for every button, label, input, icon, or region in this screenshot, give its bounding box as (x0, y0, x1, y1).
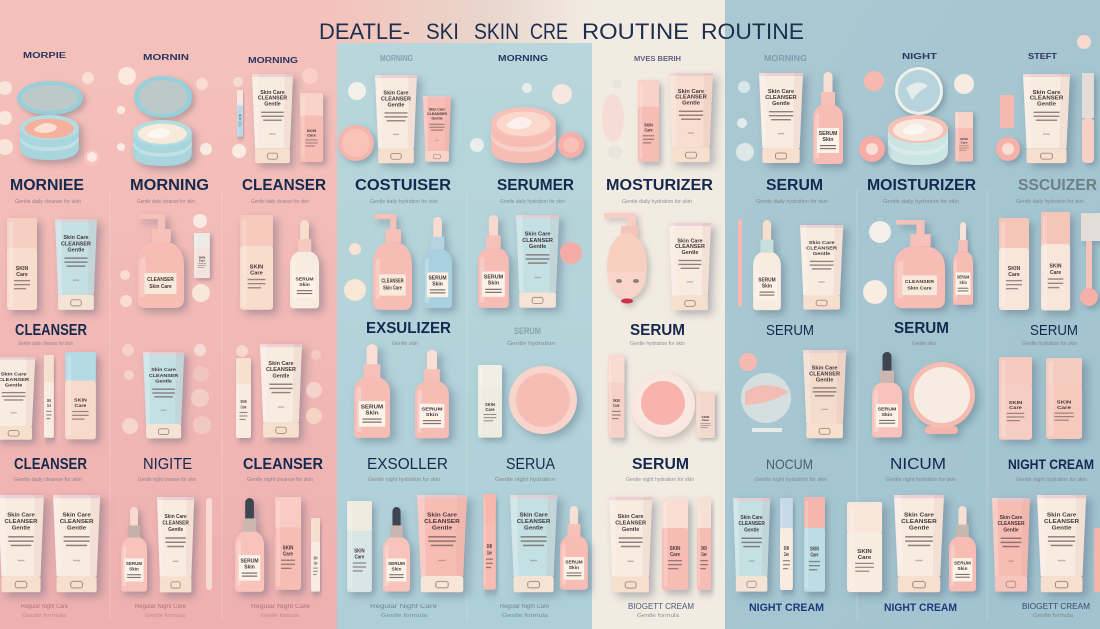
step heading: SERUM (766, 322, 814, 339)
description: Gentle daily cleanse for skin (14, 477, 82, 483)
bottle (847, 502, 882, 592)
step heading: NIGITE (143, 456, 192, 473)
pump head (604, 213, 647, 304)
product name: BIOGETT CREAM (628, 602, 694, 611)
title: SKI (426, 19, 459, 44)
pink tube (423, 96, 451, 162)
stick bottle (478, 365, 502, 438)
cream dabs (236, 345, 322, 424)
jar (888, 115, 948, 165)
dropper bottle (478, 215, 509, 308)
step heading: NICUM (890, 456, 946, 473)
pump bottle (894, 220, 945, 308)
tube (800, 225, 843, 310)
description: Gentle daily cleanse for skin (251, 199, 309, 205)
description: Gentle skin (392, 341, 418, 347)
bottle (1041, 212, 1070, 310)
pink stick (483, 494, 496, 590)
dropper bottle (290, 220, 319, 308)
panel: row 2 column 3 (240, 215, 319, 310)
step heading: SSCUIZER (1018, 177, 1097, 194)
description: Gentle night hydration for skin (1016, 477, 1087, 483)
tube (894, 495, 944, 592)
tube (733, 498, 770, 592)
bottle (240, 215, 273, 310)
pump bottle (373, 214, 412, 310)
stick (780, 498, 793, 590)
step label: MORNING (248, 56, 298, 65)
dropper bottle (415, 350, 449, 438)
panel: row 4 column 8 (847, 495, 976, 614)
cream dabs (470, 83, 572, 152)
description: Gentle hydration for skin (1022, 341, 1077, 347)
round mirror (909, 362, 975, 434)
round cream jar (631, 373, 695, 437)
tube (510, 495, 557, 592)
tube (53, 495, 100, 592)
description: Gentle daily hydration for skin (622, 199, 692, 205)
panel: row 1 column 3 (232, 56, 326, 205)
panel: row 2 column 5 (478, 215, 582, 347)
product note: Gentle formula (22, 613, 66, 619)
glass globe (741, 373, 791, 432)
panel: row 3 column 8 (872, 352, 975, 483)
description: Gentle daily hydration for skin (370, 199, 438, 205)
tube (669, 73, 713, 162)
pink bottle (662, 498, 688, 590)
panel: row 4 column 6 (609, 497, 711, 619)
step heading: SERUM (894, 320, 949, 337)
panel: row 3 column 9 (999, 357, 1094, 483)
tube (1037, 495, 1086, 592)
step heading: MORNIEE (10, 177, 84, 194)
edge stick (1094, 528, 1100, 592)
product name: NIGHT CREAM (749, 602, 824, 614)
compact mirror lid (134, 76, 192, 118)
step label: MORNING (380, 54, 413, 63)
cream dab (348, 82, 366, 100)
dropper bottle (813, 72, 843, 164)
title: ROUTINE (701, 19, 804, 44)
lip bottle (804, 497, 825, 592)
panel: row 4 column 4 (347, 495, 467, 619)
step heading: MOISTURIZER (867, 177, 976, 194)
step label: MORNIN (143, 53, 189, 62)
slim bottle (697, 498, 711, 590)
tube (143, 352, 184, 438)
panel: row 3 column 4 (354, 344, 449, 483)
compact mirror lid (17, 81, 83, 115)
panel: row 4 column 1 (0, 495, 100, 619)
cream puff (954, 74, 974, 94)
title: CRE (530, 19, 568, 44)
compact jar (20, 115, 79, 160)
dropper bottle (121, 507, 147, 592)
panel: row 2 column 1 (7, 218, 97, 347)
tube (609, 497, 652, 592)
compact lid (895, 67, 943, 115)
tube (375, 75, 417, 163)
product note: Gentle formula (637, 613, 679, 619)
tube (252, 74, 293, 163)
tube (417, 495, 467, 592)
panel: row 1 column 2 (117, 53, 212, 205)
small bottle (194, 233, 210, 278)
round cream jar (509, 366, 577, 434)
step heading: CLEANSER (14, 456, 87, 473)
description: Gentle daily hydration for skin (1016, 199, 1084, 205)
cream dab (1077, 35, 1091, 49)
panel: row 3 column 1 (0, 352, 96, 483)
tube (759, 73, 803, 163)
description: Gentle daily cleanse for skin (15, 199, 81, 205)
title: DEATLE- (319, 19, 410, 44)
description: Gentle hydration for skin (630, 341, 685, 347)
product note: Gentle formula (145, 613, 185, 619)
panel: row 1 column 5 (470, 54, 584, 205)
pink box (955, 112, 973, 162)
cream dabs (122, 344, 211, 434)
pink disc (558, 132, 584, 158)
description: Gentle skin (912, 341, 936, 347)
spray bottle (999, 357, 1032, 440)
panel: row 1 column 1 (0, 51, 100, 205)
slim bottle (608, 355, 624, 438)
dropper bottle (753, 220, 781, 310)
description: Gentle night hydration (495, 477, 555, 483)
product note: Gentle formula (261, 613, 299, 619)
pink compact (338, 125, 374, 161)
pink bottle (275, 497, 301, 590)
step heading: SERUM (1030, 322, 1078, 339)
pump bottle (137, 214, 184, 308)
product note: Gentle formula (502, 613, 548, 619)
pink disc (560, 242, 582, 264)
swirl decoration (602, 79, 624, 159)
step heading: SERUM (630, 322, 685, 339)
description: Gentle night cleanse for skin (247, 477, 313, 483)
panel: row 1 column 7 (736, 54, 843, 205)
step label: STEFT (1028, 52, 1057, 61)
product note: Gentle formula (1033, 613, 1073, 619)
tube (55, 219, 97, 310)
description: Gentle daily hydration for skin (500, 199, 565, 205)
panel: row 1 column 6 (602, 56, 713, 205)
tube (260, 344, 302, 438)
description: Gentle hydration (507, 341, 555, 347)
panel: row 4 column 9 (992, 495, 1100, 619)
cream dabs (736, 81, 754, 161)
panel: row 4 column 7 (733, 497, 825, 614)
tube (516, 215, 559, 308)
description: Gentle daily cleanse for skin (18, 341, 73, 347)
panel: row 2 column 7 (738, 219, 843, 339)
dropper bottle (949, 506, 976, 592)
panel: row 4 column 5 (483, 494, 588, 619)
dropper bottle (560, 506, 588, 590)
product name: Regular Night Care (21, 604, 69, 610)
bottle (1046, 358, 1082, 439)
product name: BIOGETT CREAM (1022, 602, 1090, 611)
product name: NIGHT CREAM (884, 602, 957, 614)
panel: row 1 column 4 (338, 54, 451, 205)
small bottle (696, 392, 715, 438)
step label: NIGHT (902, 52, 937, 61)
description: Gentle night hydration for skin (368, 477, 440, 483)
step heading: NOCUM (766, 456, 813, 472)
title: ROUTINE (582, 19, 689, 44)
dropper bottle (383, 507, 410, 592)
product name: Regular Night Care (251, 604, 311, 610)
pink tube (992, 498, 1030, 592)
compact jar (133, 120, 192, 166)
description: Gentle daily hydration for skin (756, 199, 828, 205)
step label: MVES BERIH (634, 56, 681, 63)
step label: MORPIE (23, 51, 67, 60)
dropper bottle (235, 498, 264, 592)
title: SKIN (474, 19, 519, 44)
step heading: SERUMER (497, 177, 574, 194)
step heading: CLEANSER (242, 177, 326, 194)
product name: Regular Night Care (370, 604, 438, 610)
panel: row 1 column 8 (859, 52, 976, 205)
panel: row 4 column 3 (235, 497, 320, 619)
stick bottle (236, 358, 251, 438)
panel: row 3 column 6 (608, 355, 715, 483)
jar (491, 107, 556, 163)
panel: row 3 column 2 (122, 344, 211, 483)
pink bottle (300, 93, 323, 162)
panel: row 3 column 3 (236, 344, 323, 483)
description: Gentle daily hydration for skin (883, 199, 959, 205)
step heading: SERUM (766, 177, 823, 194)
step label: MORNING (764, 54, 807, 63)
bottle (7, 218, 37, 310)
step heading: MORNING (130, 177, 209, 194)
step heading: CLEANSER (243, 456, 323, 473)
stick (44, 355, 54, 438)
tube (0, 495, 44, 592)
cotton puff (869, 221, 891, 243)
pink disc top (864, 71, 884, 91)
description: Gentle daily cleanse for skin (137, 199, 195, 205)
panel: row 3 column 7 (739, 350, 846, 483)
tube (803, 350, 846, 438)
panel: row 2 column 9 (999, 212, 1100, 347)
small pink box (1000, 95, 1014, 128)
panel: row 2 column 6 (604, 213, 711, 347)
panel: row 2 column 4 (344, 214, 452, 347)
step heading: CLEANSER (15, 322, 87, 339)
dropper bottle (872, 352, 902, 438)
tube (0, 357, 35, 440)
step heading: EXSULIZER (366, 320, 451, 337)
step heading: EXSOLLER (367, 456, 448, 473)
tube (669, 223, 711, 310)
product note: Gentle formula (381, 613, 427, 619)
panel: row 1 column 9 (996, 35, 1097, 205)
thin applicator (237, 90, 243, 137)
bottle (65, 352, 96, 439)
pink disc (996, 137, 1020, 161)
cream dabs (117, 67, 212, 155)
dropper bottle (354, 344, 390, 438)
tube (157, 497, 194, 592)
tube (1023, 74, 1070, 163)
cream dabs (0, 72, 100, 166)
cream dabs (232, 68, 318, 158)
brush (1082, 73, 1094, 163)
step label: MORNING (498, 54, 548, 63)
bottle (999, 218, 1029, 310)
stick (311, 518, 320, 592)
description: Gentle night hydration for skin (626, 477, 694, 483)
panel: row 2 column 2 (120, 214, 210, 308)
cream dabs (344, 243, 366, 301)
description: Gentle night cleanse for skin (138, 477, 196, 483)
step heading: SERUM (514, 326, 541, 336)
panel: row 3 column 5 (478, 365, 577, 483)
pink disc (739, 353, 757, 371)
product name: Regular Night Care (500, 604, 550, 610)
step heading: SERUM (632, 456, 689, 473)
step heading: MOSTURIZER (606, 177, 713, 194)
step heading: COSTUISER (355, 177, 451, 194)
thin stick (738, 219, 742, 307)
step heading: SERUA (506, 456, 556, 473)
brush (1080, 213, 1100, 306)
description: Gentle night hydration for skin (886, 477, 956, 483)
product name: Regular Night Care (135, 604, 187, 610)
panel: row 4 column 2 (121, 497, 212, 619)
cream dabs (120, 214, 210, 307)
cream disc (863, 280, 887, 304)
bottle (347, 501, 372, 592)
dropper bottle (423, 217, 452, 308)
pink disc bottom (859, 136, 885, 162)
pink bottle (638, 80, 659, 162)
thin stick (206, 498, 212, 590)
panel: row 2 column 8 (863, 220, 973, 347)
slim dropper (953, 222, 973, 305)
description: Gentle night hydration for skin (755, 477, 827, 483)
